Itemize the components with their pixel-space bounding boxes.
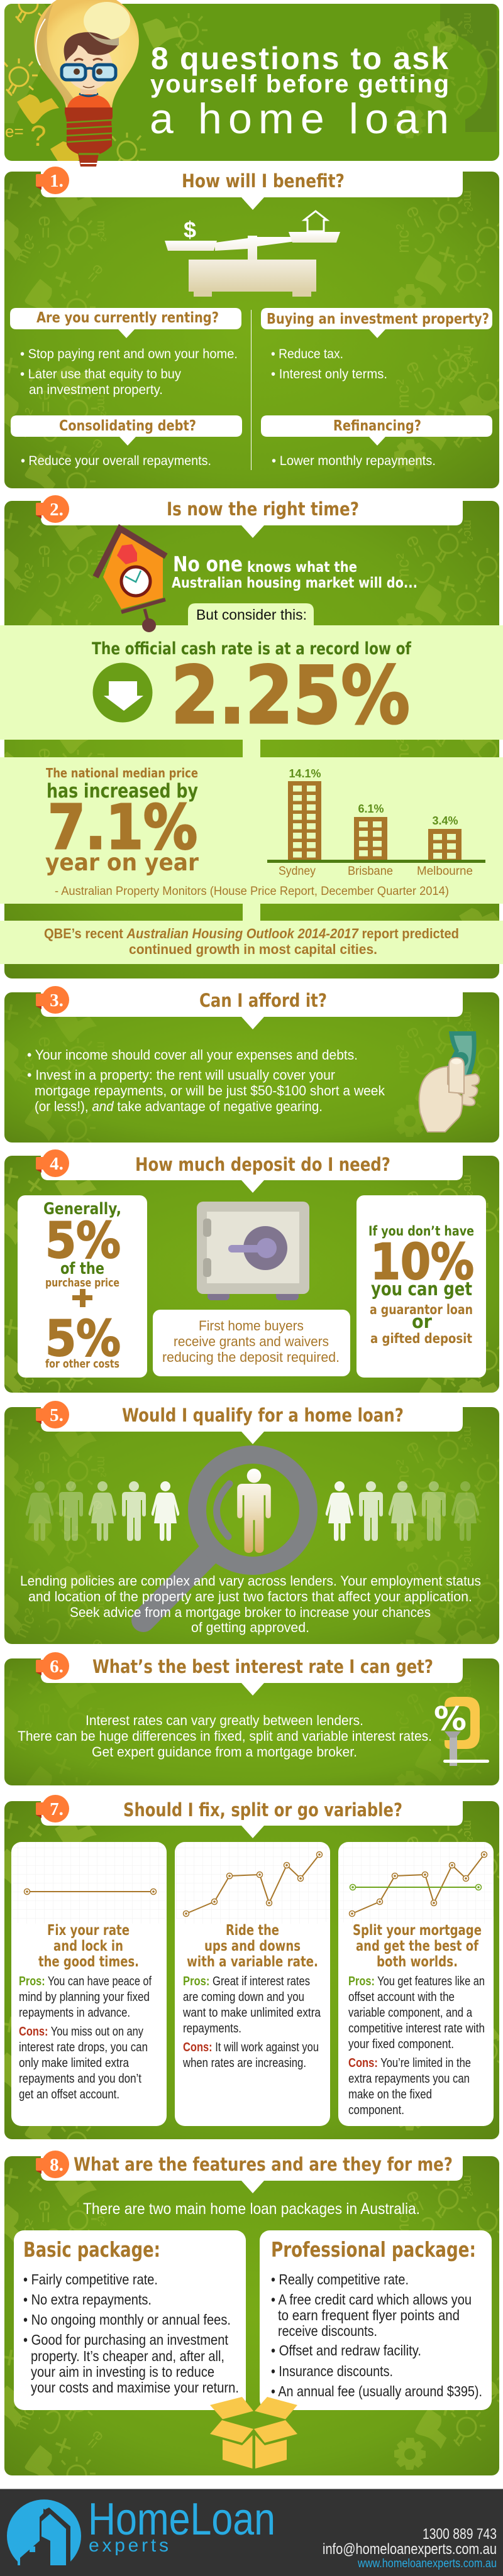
badge 8 — [36, 2151, 69, 2178]
sub heading: refinancing — [261, 415, 492, 446]
panel 3: can I afford it — [0, 986, 503, 1245]
text: no one knows: knows what the — [247, 559, 357, 576]
title: 8 questions to ask: 8 questions to ask — [151, 41, 448, 76]
badge 3 — [36, 986, 69, 1014]
investment bullets: • Reduce tax. — [271, 347, 343, 361]
card: split rate: extra repayments you can — [348, 2072, 470, 2086]
badge 4: 4. — [50, 1154, 64, 1174]
text: lending policies: of getting approved. — [191, 1620, 309, 1635]
renting bullets — [20, 347, 238, 397]
sub heading: consolidating — [11, 415, 242, 446]
heading bar 2 — [41, 501, 463, 538]
card: generally 5 percent — [18, 1195, 147, 1378]
panel 6: best interest rate — [4, 1652, 499, 1785]
card: basic package: • Fairly competitive rate. — [23, 2271, 158, 2288]
text: affordability bullets: mortgage repayments, or will be just $50-$100 short a week — [35, 1083, 385, 1099]
card: split rate: both worlds. — [377, 1954, 458, 1970]
text: QBE outlook: continued growth in most capital cities. — [129, 941, 377, 957]
renting bullets: an investment property. — [29, 383, 163, 397]
card: split rate: competitive interest rate with — [348, 2022, 485, 2036]
badge 7: 7. — [50, 1799, 64, 1819]
badge 5: 5. — [50, 1405, 64, 1425]
renting bullets: • Stop paying rent and own your home. — [20, 347, 238, 361]
line chart: split — [350, 1851, 487, 1917]
icon: hand holding money — [419, 1031, 479, 1132]
investment bullets: • Interest only terms. — [271, 367, 387, 381]
panel 2: is now the right time — [0, 495, 503, 978]
panel: header banner: e= — [5, 122, 24, 141]
panel: header banner: ? — [30, 119, 47, 152]
panel 1: how will I benefit — [4, 167, 499, 488]
icon: selected person — [237, 1469, 271, 1553]
card: generally 5 percent: Generally, — [43, 1200, 121, 1219]
heading 7: Should I fix, split or go variable? — [123, 1799, 402, 1821]
card: fixed rate: mind by planning your fixed — [19, 1990, 150, 2004]
card: professional package: • A free credit card which allows you — [271, 2291, 472, 2308]
consolidating bullet: • Reduce your overall repayments. — [21, 454, 211, 468]
card: if you don't have 10 percent: If you don’t have — [368, 1224, 474, 1239]
card: variable rate: Cons: It will work against you — [183, 2041, 319, 2054]
chart: city price growth: Sydney — [279, 865, 316, 878]
card: generally 5 percent: of the — [60, 1259, 104, 1278]
card: if you don't have 10 percent: or — [412, 1311, 433, 1332]
card: fixed rate: get an offset account. — [19, 2088, 119, 2102]
card: basic package: your aim in investing is to reduce — [31, 2364, 214, 2380]
text: lending policies: Lending policies are complex and vary across lenders. Your employment status — [20, 1573, 481, 1589]
heading 1: How will I benefit? — [182, 170, 345, 192]
heading bar 6 — [41, 1658, 463, 1696]
card: variable rate: Ride the — [226, 1922, 279, 1939]
text: no one knows: No one — [173, 552, 243, 576]
heading 3: Can I afford it? — [199, 990, 327, 1011]
panel 4: how much deposit — [0, 1149, 503, 1547]
badge 8: 8. — [50, 2155, 64, 2175]
heading 4: How much deposit do I need? — [135, 1154, 390, 1175]
card: fixed rate: repayments in advance. — [19, 2006, 130, 2020]
logo wordmark: experts: experts — [89, 2535, 169, 2556]
badge 5 — [36, 1401, 69, 1428]
text: national median price: 7.1% — [48, 792, 197, 863]
card: variable rate: ups and downs — [204, 1938, 301, 1954]
card: variable rate: repayments. — [183, 2022, 241, 2036]
logo wordmark: HomeLoan: HomeLoan — [88, 2494, 275, 2545]
number: 2.25%: 2.25% — [171, 649, 410, 742]
tab: but consider this — [188, 603, 314, 625]
sub heading: refinancing: Refinancing? — [333, 418, 421, 434]
card: basic package: • No ongoing monthly or annual fees. — [23, 2311, 231, 2328]
heading bar 4 — [41, 1156, 463, 1193]
card: fixed rate: repayments and you don’t — [19, 2072, 141, 2086]
card: first home buyers: First home buyers — [199, 1318, 304, 1334]
sub heading: renting — [10, 308, 241, 338]
refinancing bullet: • Lower monthly repayments. — [272, 454, 436, 468]
bar: Sydney — [288, 781, 321, 860]
sub heading: renting: Are you currently renting? — [36, 310, 219, 326]
text: official cash rate: The official cash rate is at a record low of — [92, 639, 411, 659]
chart: city price growth: Brisbane — [348, 865, 393, 878]
heading 2: Is now the right time? — [167, 498, 359, 520]
card: fixed rate: Fix your rate — [47, 1922, 130, 1939]
tab: but consider this: But consider this: — [196, 606, 307, 623]
footer — [0, 2489, 503, 2576]
renting bullets: • Later use that equity to buy — [20, 367, 181, 381]
card: variable rate: are coming down and you — [183, 1990, 304, 2004]
text: source: - Australian Property Monitors (House Price Report, December Quarter 2014) — [55, 885, 449, 898]
card: professional package — [260, 2230, 492, 2410]
icon: cuckoo clock — [96, 529, 166, 632]
text: national median price: has increased by — [47, 780, 198, 803]
heading bar 3 — [41, 992, 463, 1029]
chart: city price growth — [267, 767, 485, 878]
text: national median price — [45, 765, 199, 876]
heading bar 5 — [41, 1407, 463, 1444]
badge 1 — [36, 167, 69, 194]
chart: city price growth: 6.1% — [358, 803, 384, 815]
text: lending policies: and location of the property are just two factors that affect your application. — [28, 1589, 472, 1604]
card: basic package: • No extra repayments. — [23, 2291, 152, 2308]
card: split rate — [338, 1842, 494, 2126]
text: QBE outlook — [44, 926, 459, 957]
card: basic package: Basic package: — [23, 2237, 160, 2262]
text: no one knows — [172, 552, 417, 591]
text: interest rates: Get expert guidance from a mortgage broker. — [92, 1744, 357, 1760]
icon: balance scale with dollar and house: $ — [184, 217, 196, 243]
sub heading: investment — [261, 308, 492, 338]
icon: balance scale with dollar and house — [165, 211, 340, 297]
text: affordability bullets: (or less!), and take advantage of negative gearing. — [35, 1099, 323, 1114]
text: interest rates: Interest rates can vary greatly between lenders. — [86, 1713, 363, 1728]
card: split rate: make on the fixed — [348, 2088, 432, 2102]
card: professional package: • Offset and redraw facility. — [271, 2342, 421, 2359]
card: generally 5 percent: for other costs — [45, 1357, 119, 1371]
card: variable rate: with a variable rate. — [187, 1954, 318, 1970]
chart: city price growth: 14.1% — [289, 767, 321, 780]
title: a home loan: a home loan — [150, 95, 449, 143]
card: professional package: • Insurance discounts. — [271, 2363, 393, 2379]
heading 6: What’s the best interest rate I can get? — [92, 1656, 433, 1677]
sub heading: consolidating: Consolidating debt? — [59, 418, 196, 434]
icon: light bulb with boy — [34, 0, 139, 167]
band: cash rate — [0, 625, 503, 740]
card: split rate: your fixed component. — [348, 2037, 454, 2051]
card: fixed rate: only make limited extra — [19, 2056, 130, 2070]
card: variable rate — [175, 1842, 330, 2126]
card: professional package: to earn frequent flyer points and — [278, 2307, 460, 2323]
band: QBE — [0, 921, 503, 964]
card: professional package: • Really competitive rate. — [271, 2271, 409, 2288]
heading 5: Would I qualify for a home loan? — [122, 1405, 404, 1426]
card: generally 5 percent: purchase price — [45, 1276, 119, 1290]
card: first home buyers: receive grants and waivers — [174, 1334, 329, 1349]
card: basic package: • Good for purchasing an investment — [23, 2332, 229, 2348]
text: national median price: year on year — [45, 849, 199, 876]
icon: safe — [197, 1202, 309, 1300]
text: interest rates — [18, 1713, 432, 1760]
title: yourself before getting: yourself before getting — [150, 70, 449, 98]
chart: city price growth: 3.4% — [432, 814, 458, 827]
card: fixed rate: Cons: You miss out on any — [19, 2025, 143, 2039]
text: two main packages: There are two main home loan packages in Australia. — [83, 2200, 420, 2218]
card: fixed rate — [11, 1842, 167, 2126]
card: fixed rate: and lock in — [53, 1938, 123, 1954]
card: fixed rate: the good times. — [38, 1954, 139, 1970]
card: split rate: variable component, and a — [348, 2006, 473, 2020]
panel: header banner — [4, 4, 499, 161]
heading bar 1 — [41, 172, 463, 210]
panel 5: would I qualify — [0, 1401, 503, 1780]
card: variable rate: Pros: Great if interest rates — [183, 1975, 310, 1988]
text: affordability bullets: • Invest in a property: the rent will usually cover your — [27, 1067, 335, 1083]
badge 6 — [36, 1652, 69, 1680]
card: fixed rate: interest rate drops, you can — [19, 2041, 148, 2054]
text: interest rates: There can be huge differences in fixed, split and variable interest rates. — [18, 1728, 432, 1744]
icon: magnifying glass — [143, 1454, 308, 1620]
card: basic package — [14, 2230, 246, 2410]
card: if you don't have 10 percent — [357, 1195, 486, 1378]
band: median price — [0, 757, 503, 904]
text: affordability bullets: • Your income should cover all your expenses and debts. — [27, 1047, 358, 1063]
card: variable rate: when rates are increasing. — [182, 2056, 306, 2070]
text: national median price: The national median price — [46, 765, 198, 781]
badge 6: 6. — [50, 1657, 64, 1677]
card: first home buyers — [153, 1310, 350, 1376]
panel 7: fix split or variable — [0, 1795, 503, 2239]
text: no one knows: Australian housing market will do... — [172, 575, 417, 591]
text: lending policies: Seek advice from a mortgage broker to increase your chances — [70, 1604, 431, 1620]
badge 2: 2. — [50, 500, 64, 520]
badge 4 — [36, 1149, 69, 1177]
text: lending policies — [20, 1573, 481, 1635]
card: fixed rate: Pros: You can have peace of — [19, 1975, 152, 1988]
heading bar 7 — [41, 1801, 463, 1838]
bar: Melbourne — [428, 829, 462, 860]
badge 1: 1. — [50, 171, 64, 191]
card: if you don't have 10 percent: 10% — [370, 1234, 474, 1291]
bar: Brisbane — [354, 817, 387, 860]
card: split rate: offset account with the — [348, 1990, 455, 2004]
logo: house in blue circle — [7, 2499, 81, 2567]
card: generally 5 percent: 5% — [45, 1311, 121, 1367]
card: basic package: property. It’s cheaper and, after all, — [31, 2348, 224, 2364]
card: professional package: receive discounts. — [278, 2323, 377, 2339]
badge 7 — [36, 1795, 69, 1822]
card: variable rate: want to make unlimited extra — [182, 2006, 321, 2020]
chart: city price growth: Melbourne — [417, 865, 473, 878]
card: if you don't have 10 percent: you can get — [371, 1278, 472, 1300]
icon: down arrow — [93, 662, 152, 723]
card: if you don't have 10 percent: a guarantor loan — [370, 1302, 473, 1317]
icon: open box — [210, 2397, 297, 2469]
badge 2 — [36, 495, 69, 523]
text: QBE outlook: QBE’s recent Australian Housing Outlook 2014-2017 report predicted — [44, 926, 459, 941]
badge 3: 3. — [50, 990, 64, 1011]
icon: clamp with percent: % — [434, 1701, 467, 1738]
text: affordability bullets — [27, 1047, 385, 1114]
card: first home buyers: reducing the deposit required. — [162, 1349, 340, 1365]
card: generally 5 percent: 5% — [45, 1213, 121, 1269]
card: if you don't have 10 percent: a gifted deposit — [370, 1331, 472, 1346]
card: split rate: component. — [348, 2103, 404, 2117]
line chart: fixed — [24, 1889, 156, 1894]
people row — [26, 1481, 479, 1541]
line chart: variable — [184, 1851, 322, 1917]
panel 8: features — [0, 2151, 503, 2576]
card: basic package: your costs and maximise your return. — [31, 2379, 239, 2396]
icon: clamp with percent — [434, 1697, 489, 1766]
heading bar 8 — [41, 2156, 463, 2193]
card: split rate: Cons: You’re limited in the — [348, 2056, 471, 2070]
investment bullets — [271, 347, 387, 381]
